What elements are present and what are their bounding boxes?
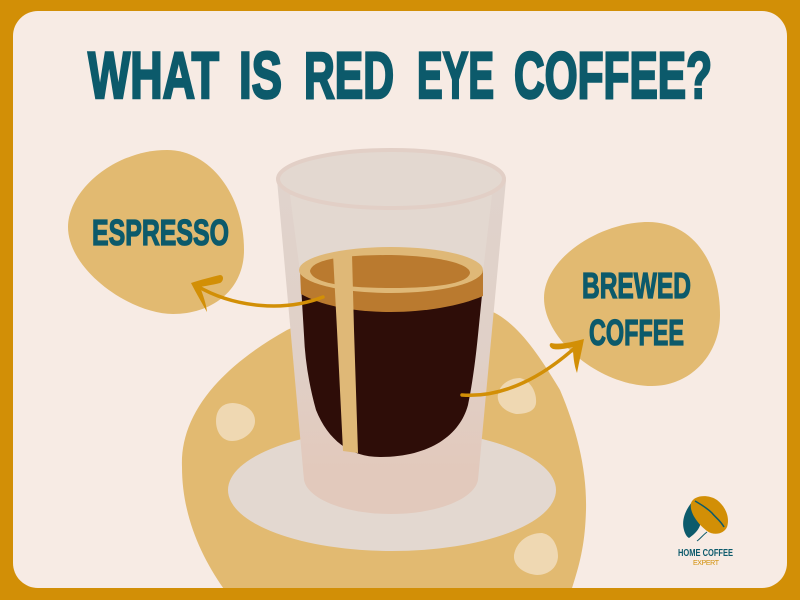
bubble: espresso: [68, 150, 244, 314]
coffee: crema top: [299, 247, 483, 293]
glass: [277, 150, 506, 514]
title: WHAT: [88, 38, 219, 112]
label: coffee: COFFEE: [589, 312, 684, 353]
logo text: home coffee: HOME COFFEE: [678, 548, 733, 559]
logo: home coffee expert: [678, 496, 733, 567]
coffee: crema inner: [310, 255, 470, 288]
title: IS: [239, 38, 282, 112]
icon: blob spot bottom: [514, 533, 558, 575]
icon: stem: [697, 532, 707, 541]
label: brewed: BREWED: [582, 265, 691, 306]
title: EYE: [417, 38, 494, 112]
icon: blob spot right: [498, 378, 536, 414]
glass highlight streak: [333, 254, 358, 453]
bubble: brewed coffee: [544, 222, 720, 386]
title: RED: [304, 38, 394, 112]
label: espresso: ESPRESSO: [92, 212, 229, 253]
title: [88, 38, 712, 112]
icon: bean crease: [695, 501, 724, 527]
icon: leaf: [683, 500, 701, 538]
glass interior: [290, 195, 492, 272]
illustration: background blob: [182, 305, 586, 600]
coffee: brewed layer: [301, 285, 483, 457]
icon: blob spot left: [216, 403, 255, 441]
coffee: crema band: [300, 270, 483, 312]
arrow: to brewed coffee: [462, 339, 584, 395]
glass rim: [278, 150, 504, 208]
arrow: to espresso: [191, 275, 323, 312]
logo text: expert: EXPERT: [693, 560, 720, 567]
icon: coffee bean: [691, 496, 728, 534]
glass body: [277, 180, 506, 514]
saucer: [228, 429, 556, 551]
